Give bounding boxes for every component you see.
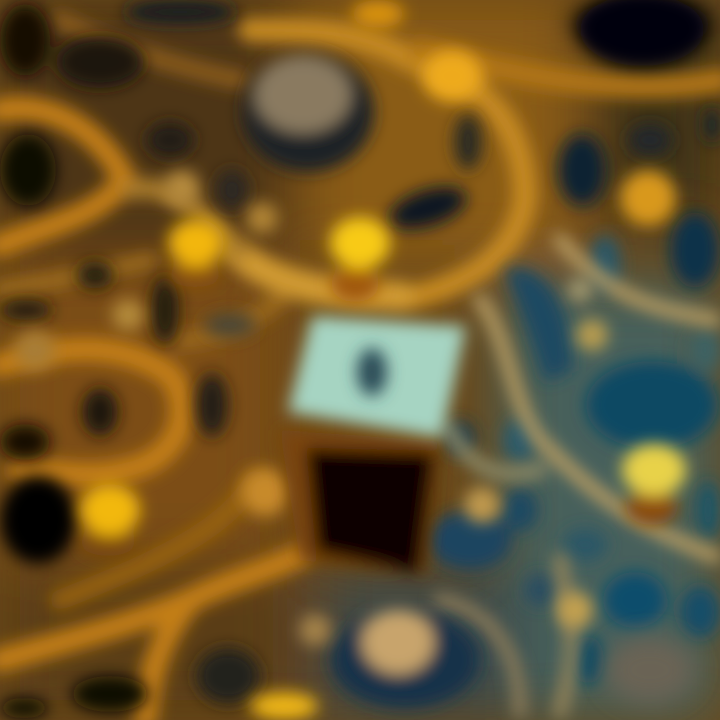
padlock face: pale teal panel: [288, 316, 466, 438]
bottom ring chip: [331, 610, 479, 708]
gold node: left upper: [168, 219, 224, 287]
top right dark hole: [572, 0, 712, 48]
gold node: right: [622, 444, 686, 525]
blue-black chips: [384, 107, 720, 237]
gold node: upper right: [422, 50, 482, 102]
top right dark disc: [580, 0, 704, 66]
gold node: bottom: [250, 692, 318, 720]
gold node: top centre: [352, 0, 404, 28]
padlock keyhole: [357, 348, 387, 396]
dark circuit gaps: [0, 0, 260, 718]
gold node: lower left: [80, 484, 140, 556]
gold node: centre: [330, 217, 390, 302]
bottom right blurred chip: [604, 636, 696, 704]
tan traces on right side: [440, 240, 715, 712]
ring around top chip: [242, 52, 374, 172]
small amber pads: [15, 170, 608, 646]
padlock body: dark brown block: [280, 430, 438, 574]
gold node: far right: [620, 170, 676, 226]
padlock: [280, 316, 466, 574]
teal circuit zones: [428, 212, 720, 684]
